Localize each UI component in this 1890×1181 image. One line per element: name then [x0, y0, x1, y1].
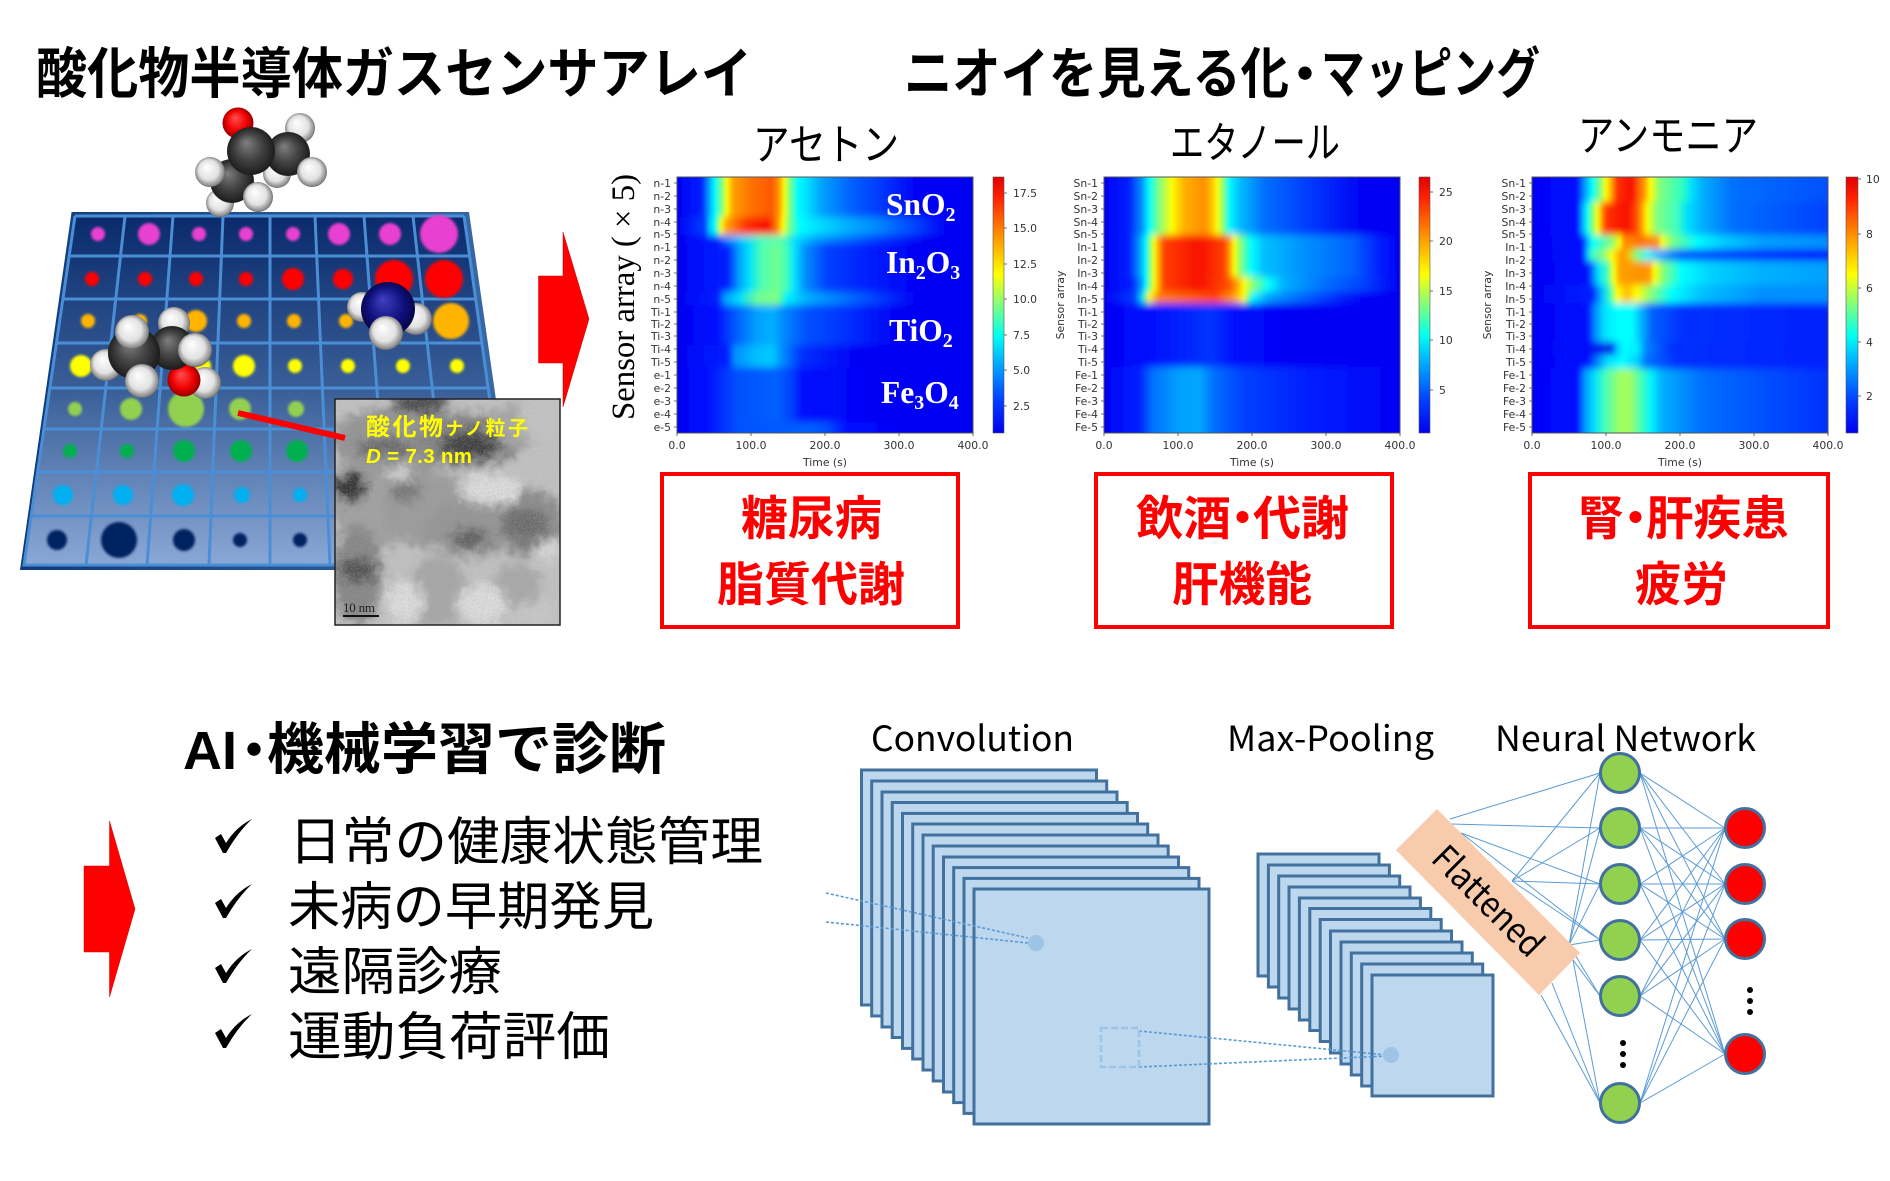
- red leader line: [238, 413, 345, 438]
- y tick labels: Ti-3: [1077, 330, 1098, 343]
- colorbar: 2: [1866, 390, 1873, 403]
- label: Max-Pooling: Max-Pooling: [1227, 711, 1434, 762]
- colorbar: 10: [1866, 173, 1880, 186]
- heading: ammonia: アンモニア: [1578, 113, 1758, 161]
- y tick labels: Ti-5: [1505, 356, 1526, 369]
- x tick labels: 300.0: [1311, 439, 1342, 452]
- colorbar: 8: [1866, 228, 1873, 241]
- colorbar: 25: [1439, 186, 1453, 199]
- y tick labels: Ti-5: [1077, 356, 1098, 369]
- y tick labels: Ti-2: [1077, 318, 1098, 331]
- y tick labels: n-1: [653, 241, 671, 254]
- x tick labels: 100.0: [736, 439, 767, 452]
- y tick labels: Sn-4: [1074, 216, 1098, 229]
- colorbar: 15.0: [1013, 222, 1037, 235]
- neural network connections: [1450, 773, 1725, 1103]
- series labels: In: [886, 245, 916, 280]
- series labels: TiO: [889, 313, 943, 348]
- y tick labels: [650, 177, 671, 434]
- y tick labels: e-3: [654, 395, 671, 408]
- x tick labels: [1523, 439, 1844, 469]
- series labels: 2: [943, 330, 953, 352]
- colorbar: 10: [1439, 334, 1453, 347]
- heatmap: ethanol: [1054, 157, 1453, 469]
- x tick labels: 0.0: [668, 439, 686, 452]
- heading: AI and machine learning diagnosis: AI: [183, 721, 237, 781]
- axis label: sensor array x5: Sensor array ( × 5): [606, 174, 642, 420]
- colorbar: [1419, 177, 1453, 433]
- label: Neural Network: Neural Network: [1495, 711, 1756, 762]
- arrow: sensing to mapping: [538, 232, 589, 407]
- x tick labels: 0.0: [1523, 439, 1541, 452]
- y tick labels: Fe-5: [1075, 421, 1098, 434]
- nanoparticle label: 酸化物ナノ粒子: [366, 414, 528, 441]
- x tick labels: [668, 439, 989, 469]
- series labels: [881, 187, 960, 414]
- TEM image of oxide nanoparticles: [334, 398, 561, 626]
- flattened layer band: [1396, 809, 1580, 995]
- y tick labels: Ti-4: [1077, 343, 1098, 356]
- title: odor mapping: [904, 43, 1540, 105]
- x tick labels: Time (s): [1657, 456, 1702, 469]
- series labels: 3: [914, 392, 924, 414]
- colorbar: 15: [1439, 285, 1453, 298]
- y tick labels: n-3: [653, 203, 671, 216]
- y tick labels: Sn-5: [1502, 228, 1526, 241]
- sensor dots: [47, 215, 469, 558]
- x tick labels: 400.0: [958, 439, 989, 452]
- colorbar: 7.5: [1013, 329, 1030, 342]
- y tick labels: e-4: [654, 408, 671, 421]
- y tick labels: Sn-3: [1502, 203, 1526, 216]
- y tick labels: Sn-5: [1074, 228, 1098, 241]
- y tick labels: Ti-1: [1077, 306, 1098, 319]
- colorbar: 12.5: [1013, 258, 1037, 271]
- y tick labels: n-2: [653, 190, 671, 203]
- y tick labels: Fe-2: [1503, 382, 1526, 395]
- max-pooling feature map stack: [1258, 854, 1493, 1096]
- y tick labels: e-5: [654, 421, 671, 434]
- heading: AI and machine learning diagnosis: 機械学習で診断: [267, 718, 666, 781]
- colorbar: 2.5: [1013, 400, 1030, 413]
- x tick labels: 300.0: [884, 439, 915, 452]
- y axis label: Sensor array: [1481, 270, 1494, 339]
- y tick labels: In-2: [1505, 254, 1526, 267]
- y tick labels: n-1: [653, 177, 671, 190]
- callout box: kidney and liver disease, fatigue: 腎: [1578, 492, 1624, 545]
- callout box: diabetes, lipid metabolism: [662, 474, 958, 627]
- label: Convolution: Convolution: [871, 711, 1074, 762]
- y tick labels: Fe-2: [1075, 382, 1098, 395]
- y tick labels: Sn-1: [1074, 177, 1098, 190]
- series labels: Fe: [881, 375, 914, 410]
- y tick labels: In-5: [1077, 293, 1098, 306]
- x tick labels: 200.0: [810, 439, 841, 452]
- y tick labels: Fe-3: [1503, 395, 1526, 408]
- y tick labels: e-1: [654, 369, 671, 382]
- molecule: ethanol: [90, 307, 221, 399]
- y tick labels: [1074, 177, 1098, 434]
- pooling focus dot: [1383, 1047, 1399, 1063]
- y tick labels: Fe-4: [1503, 408, 1526, 421]
- x tick labels: Time (s): [1229, 456, 1274, 469]
- x tick labels: 200.0: [1237, 439, 1268, 452]
- callout box: kidney and liver disease, fatigue: ・: [1612, 492, 1659, 545]
- heading: acetone: アセトン: [753, 122, 899, 170]
- check item: remote diagnosis: 遠隔診療: [288, 944, 502, 1002]
- y tick labels: Fe-3: [1075, 395, 1098, 408]
- heatmap: acetone: [650, 157, 1037, 469]
- y tick labels: Fe-5: [1503, 421, 1526, 434]
- check item: early detection: 未病の早期発見: [288, 879, 654, 937]
- checklist: [215, 814, 763, 1067]
- y tick labels: n-4: [653, 280, 671, 293]
- callout box: alcohol metabolism, liver function: 飲酒: [1136, 492, 1231, 545]
- y tick labels: In-1: [1505, 241, 1526, 254]
- y axis label: Sensor array: [1054, 270, 1067, 339]
- y tick labels: Sn-2: [1502, 190, 1526, 203]
- check item: daily health management: 日常の健康状態管理: [289, 814, 763, 872]
- y tick labels: Ti-4: [1505, 343, 1526, 356]
- x tick labels: 100.0: [1591, 439, 1622, 452]
- y tick labels: Ti-2: [1505, 318, 1526, 331]
- callout box: alcohol metabolism, liver function: 代謝: [1253, 492, 1349, 545]
- colorbar: 4: [1866, 336, 1873, 349]
- y tick labels: In-3: [1077, 267, 1098, 280]
- hidden layer nodes: [1600, 754, 1640, 1122]
- convolution feature map stack: [862, 770, 1209, 1124]
- y tick labels: In-4: [1505, 280, 1526, 293]
- callout box: alcohol metabolism, liver function: 肝機能: [1172, 558, 1312, 611]
- y tick labels: Sn-3: [1074, 203, 1098, 216]
- y tick labels: Sn-4: [1502, 216, 1526, 229]
- scale bar: 10 nm: [343, 600, 375, 615]
- callout box: kidney and liver disease, fatigue: 疲労: [1635, 558, 1728, 611]
- series labels: 4: [949, 392, 959, 414]
- panel: sensor array grid: [20, 212, 520, 570]
- y tick labels: In-2: [1077, 254, 1098, 267]
- y tick labels: [1502, 177, 1526, 434]
- y tick labels: Ti-4: [650, 343, 671, 356]
- x tick labels: Time (s): [802, 456, 847, 469]
- x tick labels: 400.0: [1385, 439, 1416, 452]
- y tick labels: Sn-1: [1502, 177, 1526, 190]
- y tick labels: Ti-1: [1505, 306, 1526, 319]
- y tick labels: Ti-3: [1505, 330, 1526, 343]
- y tick labels: e-2: [654, 382, 671, 395]
- x tick labels: 400.0: [1813, 439, 1844, 452]
- y tick labels: In-5: [1505, 293, 1526, 306]
- callout box: diabetes, lipid metabolism: 脂質代謝: [717, 558, 905, 611]
- colorbar: 5: [1439, 384, 1446, 397]
- title: oxide semiconductor gas sensor array: 酸化物半導体ガスセンサアレイ: [36, 43, 752, 105]
- heading: ethanol: エタノール: [1170, 120, 1340, 168]
- callout box: kidney and liver disease, fatigue: [1530, 474, 1828, 627]
- title: odor mapping: マッピング: [1321, 43, 1540, 105]
- y tick labels: n-5: [653, 293, 671, 306]
- y tick labels: Fe-1: [1503, 369, 1526, 382]
- title: odor mapping: ・: [1279, 47, 1331, 105]
- colorbar: 20: [1439, 235, 1453, 248]
- title: odor mapping: ニオイを見える化: [904, 43, 1289, 105]
- output layer nodes: [1726, 808, 1764, 1074]
- callout box: alcohol metabolism, liver function: ・: [1219, 492, 1266, 545]
- callout box: alcohol metabolism, liver function: [1096, 474, 1392, 627]
- series labels: 2: [916, 262, 926, 284]
- convolution focus dot: [1028, 935, 1044, 951]
- y tick labels: Ti-3: [650, 330, 671, 343]
- x tick labels: 300.0: [1739, 439, 1770, 452]
- y tick labels: n-5: [653, 228, 671, 241]
- series labels: 3: [950, 262, 960, 284]
- ellipsis dots: [1620, 987, 1753, 1068]
- y tick labels: In-1: [1077, 241, 1098, 254]
- colorbar: 17.5: [1013, 187, 1037, 200]
- series labels: O: [924, 375, 949, 410]
- y tick labels: Fe-4: [1075, 408, 1098, 421]
- molecule: acetone: [195, 108, 327, 217]
- callout box: kidney and liver disease, fatigue: 肝疾患: [1646, 492, 1789, 545]
- y tick labels: Fe-1: [1075, 369, 1098, 382]
- x tick labels: 200.0: [1665, 439, 1696, 452]
- colorbar: 5.0: [1013, 364, 1030, 377]
- y tick labels: n-4: [653, 216, 671, 229]
- x tick labels: 0.0: [1095, 439, 1113, 452]
- y tick labels: Ti-2: [650, 318, 671, 331]
- x tick labels: [1095, 439, 1416, 469]
- colorbar: 10.0: [1013, 293, 1037, 306]
- series labels: 2: [946, 204, 956, 226]
- flattened layer band: Flattened: [1422, 832, 1557, 967]
- x tick labels: 100.0: [1163, 439, 1194, 452]
- colorbar: [1846, 173, 1880, 433]
- y tick labels: Ti-5: [650, 356, 671, 369]
- y tick labels: n-3: [653, 267, 671, 280]
- nanoparticle label: D = 7.3 nm: [366, 445, 472, 468]
- heading: AI and machine learning diagnosis: ・: [228, 723, 280, 781]
- molecule: ammonia: [347, 282, 432, 350]
- series labels: SnO: [886, 187, 946, 222]
- y tick labels: In-4: [1077, 280, 1098, 293]
- colorbar: [993, 177, 1037, 433]
- y tick labels: In-3: [1505, 267, 1526, 280]
- callout box: diabetes, lipid metabolism: 糖尿病: [741, 492, 882, 545]
- colorbar: 6: [1866, 282, 1873, 295]
- heatmap: ammonia: [1481, 157, 1880, 469]
- arrow: mapping to diagnosis: [84, 821, 135, 997]
- y tick labels: Sn-2: [1074, 190, 1098, 203]
- check item: exercise load evaluation: 運動負荷評価: [288, 1009, 610, 1067]
- dashed projection lines and receptive field: [826, 893, 1387, 1067]
- y tick labels: Ti-1: [650, 306, 671, 319]
- nanoparticle label: [366, 414, 528, 468]
- series labels: O: [926, 245, 950, 280]
- y tick labels: n-2: [653, 254, 671, 267]
